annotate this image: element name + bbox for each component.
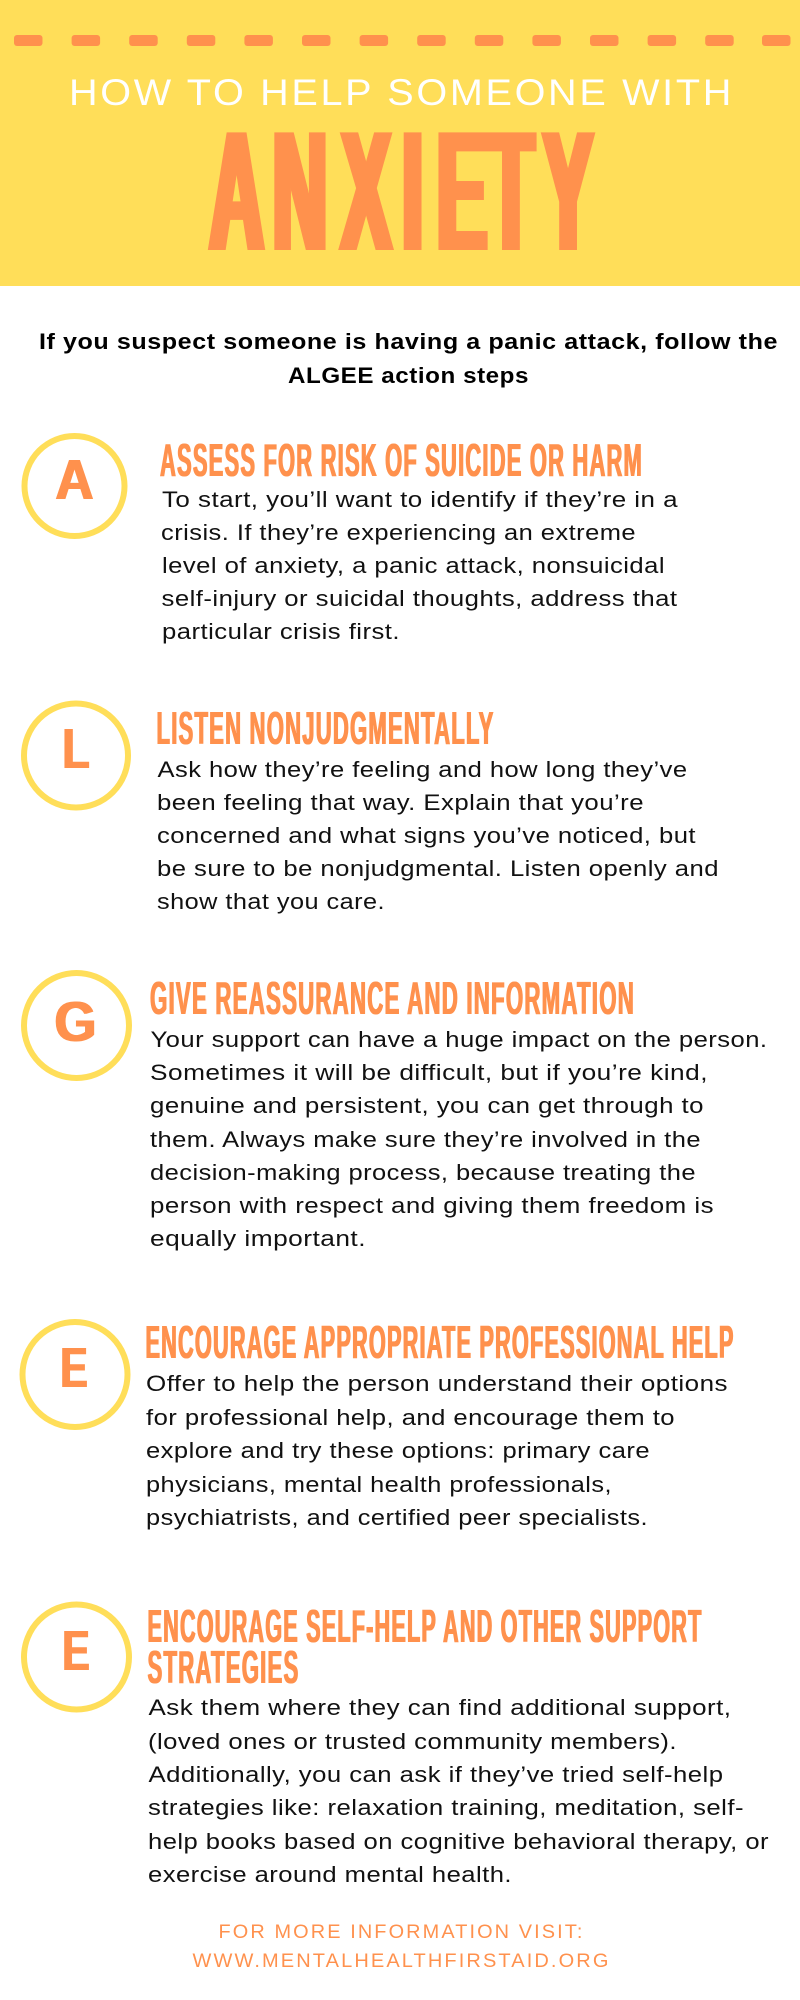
title: how to help someone with: HOW TO HELP SOMEONE WITH: [69, 72, 734, 113]
footer link text: WWW.MENTALHEALTHFIRSTAID.ORG: [192, 1951, 610, 1972]
panel: step G give reassurance: [24, 972, 768, 1251]
body text: listen: concerned and what signs you’ve noticed, but: [157, 823, 696, 848]
body text: professional help: physicians, mental health professionals,: [146, 1472, 612, 1497]
body text: assess: crisis. If they’re experiencing an extreme: [161, 520, 636, 545]
icon: letter E badge: [24, 1604, 129, 1710]
body text: self-help: help books based on cognitive behavioral therapy, or: [148, 1829, 769, 1854]
body text: self-help: strategies like: relaxation training, meditation, self-: [148, 1795, 744, 1820]
body text: professional help: for professional help, and encourage them to: [146, 1405, 675, 1430]
body text: listen: been feeling that way. Explain that you’re: [157, 790, 644, 815]
body text: listen: Ask how they’re feeling and how long they’ve: [158, 757, 688, 782]
intro text: ALGEE action steps: [288, 363, 529, 388]
body text: give reassurance: person with respect and giving them freedom is: [150, 1193, 714, 1218]
panel: step E self-help: [24, 1600, 769, 1887]
body text: self-help: (loved ones or trusted community members).: [148, 1729, 677, 1754]
body text: self-help: exercise around mental health.: [148, 1862, 512, 1887]
heading: encourage self-help: STRATEGIES: [148, 1641, 300, 1693]
intro text: [39, 329, 778, 388]
body text: self-help: [148, 1695, 769, 1887]
body text: assess: particular crisis first.: [162, 619, 400, 644]
icon: letter L badge: L: [62, 717, 90, 781]
body text: give reassurance: Sometimes it will be difficult, but if you’re kind,: [150, 1060, 708, 1085]
icon: letter G badge: [24, 973, 129, 1078]
body text: professional help: [146, 1371, 728, 1530]
heading: encourage self-help: [148, 1600, 702, 1693]
icon: letter E badge: E: [60, 1336, 88, 1400]
icon: letter E badge: [22, 1322, 128, 1427]
body text: professional help: explore and try these options: primary care: [146, 1438, 650, 1463]
body text: self-help: Additionally, you can ask if they’ve tried self-help: [148, 1762, 724, 1787]
body text: self-help: Ask them where they can find additional support,: [148, 1695, 732, 1720]
body text: professional help: Offer to help the person understand their options: [146, 1371, 728, 1396]
body text: listen: [157, 757, 719, 914]
panel: step A assess: [24, 434, 678, 644]
icon: letter L badge: [24, 704, 128, 808]
body text: give reassurance: Your support can have a huge impact on the person.: [150, 1027, 768, 1052]
header banner: [0, 0, 800, 286]
icon: letter A badge: [24, 436, 124, 536]
icon: letter G badge: G: [54, 990, 96, 1054]
body text: give reassurance: genuine and persistent, you can get through to: [150, 1093, 704, 1118]
body text: assess: To start, you’ll want to identify if they’re in a: [162, 487, 678, 512]
body text: assess: self-injury or suicidal thoughts, address that: [162, 586, 678, 611]
body text: listen: be sure to be nonjudgmental. Listen openly and: [157, 856, 719, 881]
body text: listen: show that you care.: [157, 889, 385, 914]
icon: letter E badge: E: [62, 1619, 90, 1683]
body text: assess: level of anxiety, a panic attack, nonsuicidal: [162, 553, 665, 578]
panel: step E professional help: [22, 1316, 734, 1530]
title: anxiety: ANXIETY: [209, 95, 593, 286]
body text: assess: [161, 487, 678, 644]
intro text: If you suspect someone is having a panic attack, follow the: [39, 329, 778, 354]
body text: give reassurance: them. Always make sure they’re involved in the: [150, 1127, 701, 1152]
footer link text: [192, 1922, 610, 1972]
footer link text: FOR MORE INFORMATION VISIT:: [218, 1922, 584, 1943]
body text: give reassurance: [150, 1027, 768, 1251]
body text: give reassurance: decision-making process, because treating the: [150, 1160, 696, 1185]
dashed decorative line: [14, 35, 790, 46]
icon: letter A badge: A: [56, 448, 94, 512]
body text: give reassurance: equally important.: [150, 1226, 366, 1251]
body text: professional help: psychiatrists, and certified peer specialists.: [146, 1505, 648, 1530]
panel: step L listen: [24, 702, 719, 914]
